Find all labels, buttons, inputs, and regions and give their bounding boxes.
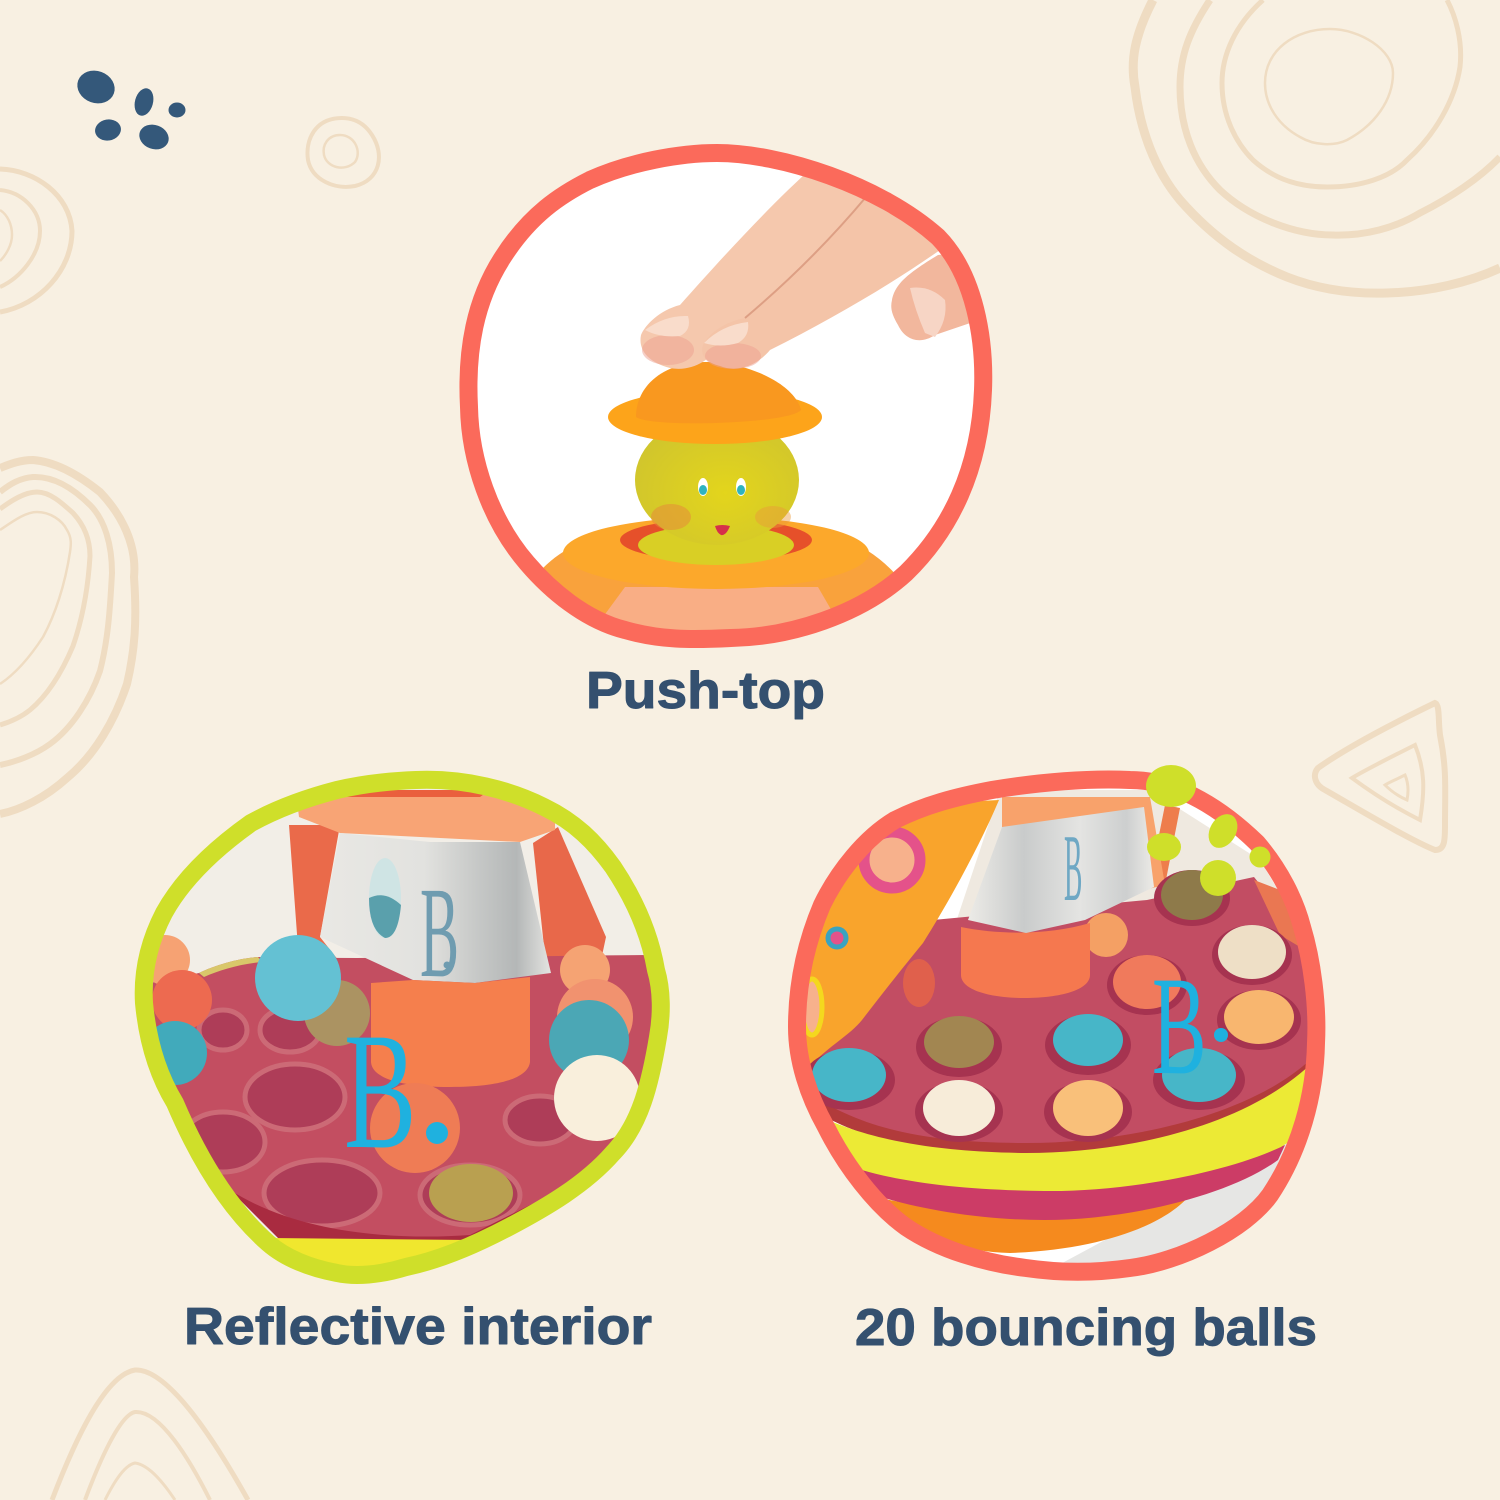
fingers [640,165,985,369]
heading: push-top: Push-top [586,662,825,720]
shadow [1064,1143,1287,1263]
ball holes [803,870,1301,1142]
panel: reflective interior photo [130,770,670,1290]
toy hat [608,362,822,444]
toy shell [543,520,894,630]
icon: lime dots [1146,765,1270,896]
heading: 20 bouncing balls: 20 bouncing balls [855,1299,1317,1357]
panel: bouncing balls photo: B [1152,947,1207,1104]
toy head [635,438,799,536]
yellow band [834,1069,1306,1191]
tray holes [181,1008,575,1226]
panel: push-top photo [450,140,1000,650]
orange base [888,1200,1186,1253]
tray [805,877,1320,1150]
icon: dots logo [73,65,186,153]
panel: reflective interior photo: B [420,860,459,1004]
heading: reflective interior: Reflective interior [184,1298,652,1356]
orange dome panel [790,800,999,1070]
magenta band [838,1145,1285,1220]
panel: bouncing balls photo: B [1064,817,1082,922]
panel: reflective interior photo: B [344,999,416,1184]
panel: bouncing balls photo [790,770,1330,1280]
glass reflection area [958,790,1277,918]
